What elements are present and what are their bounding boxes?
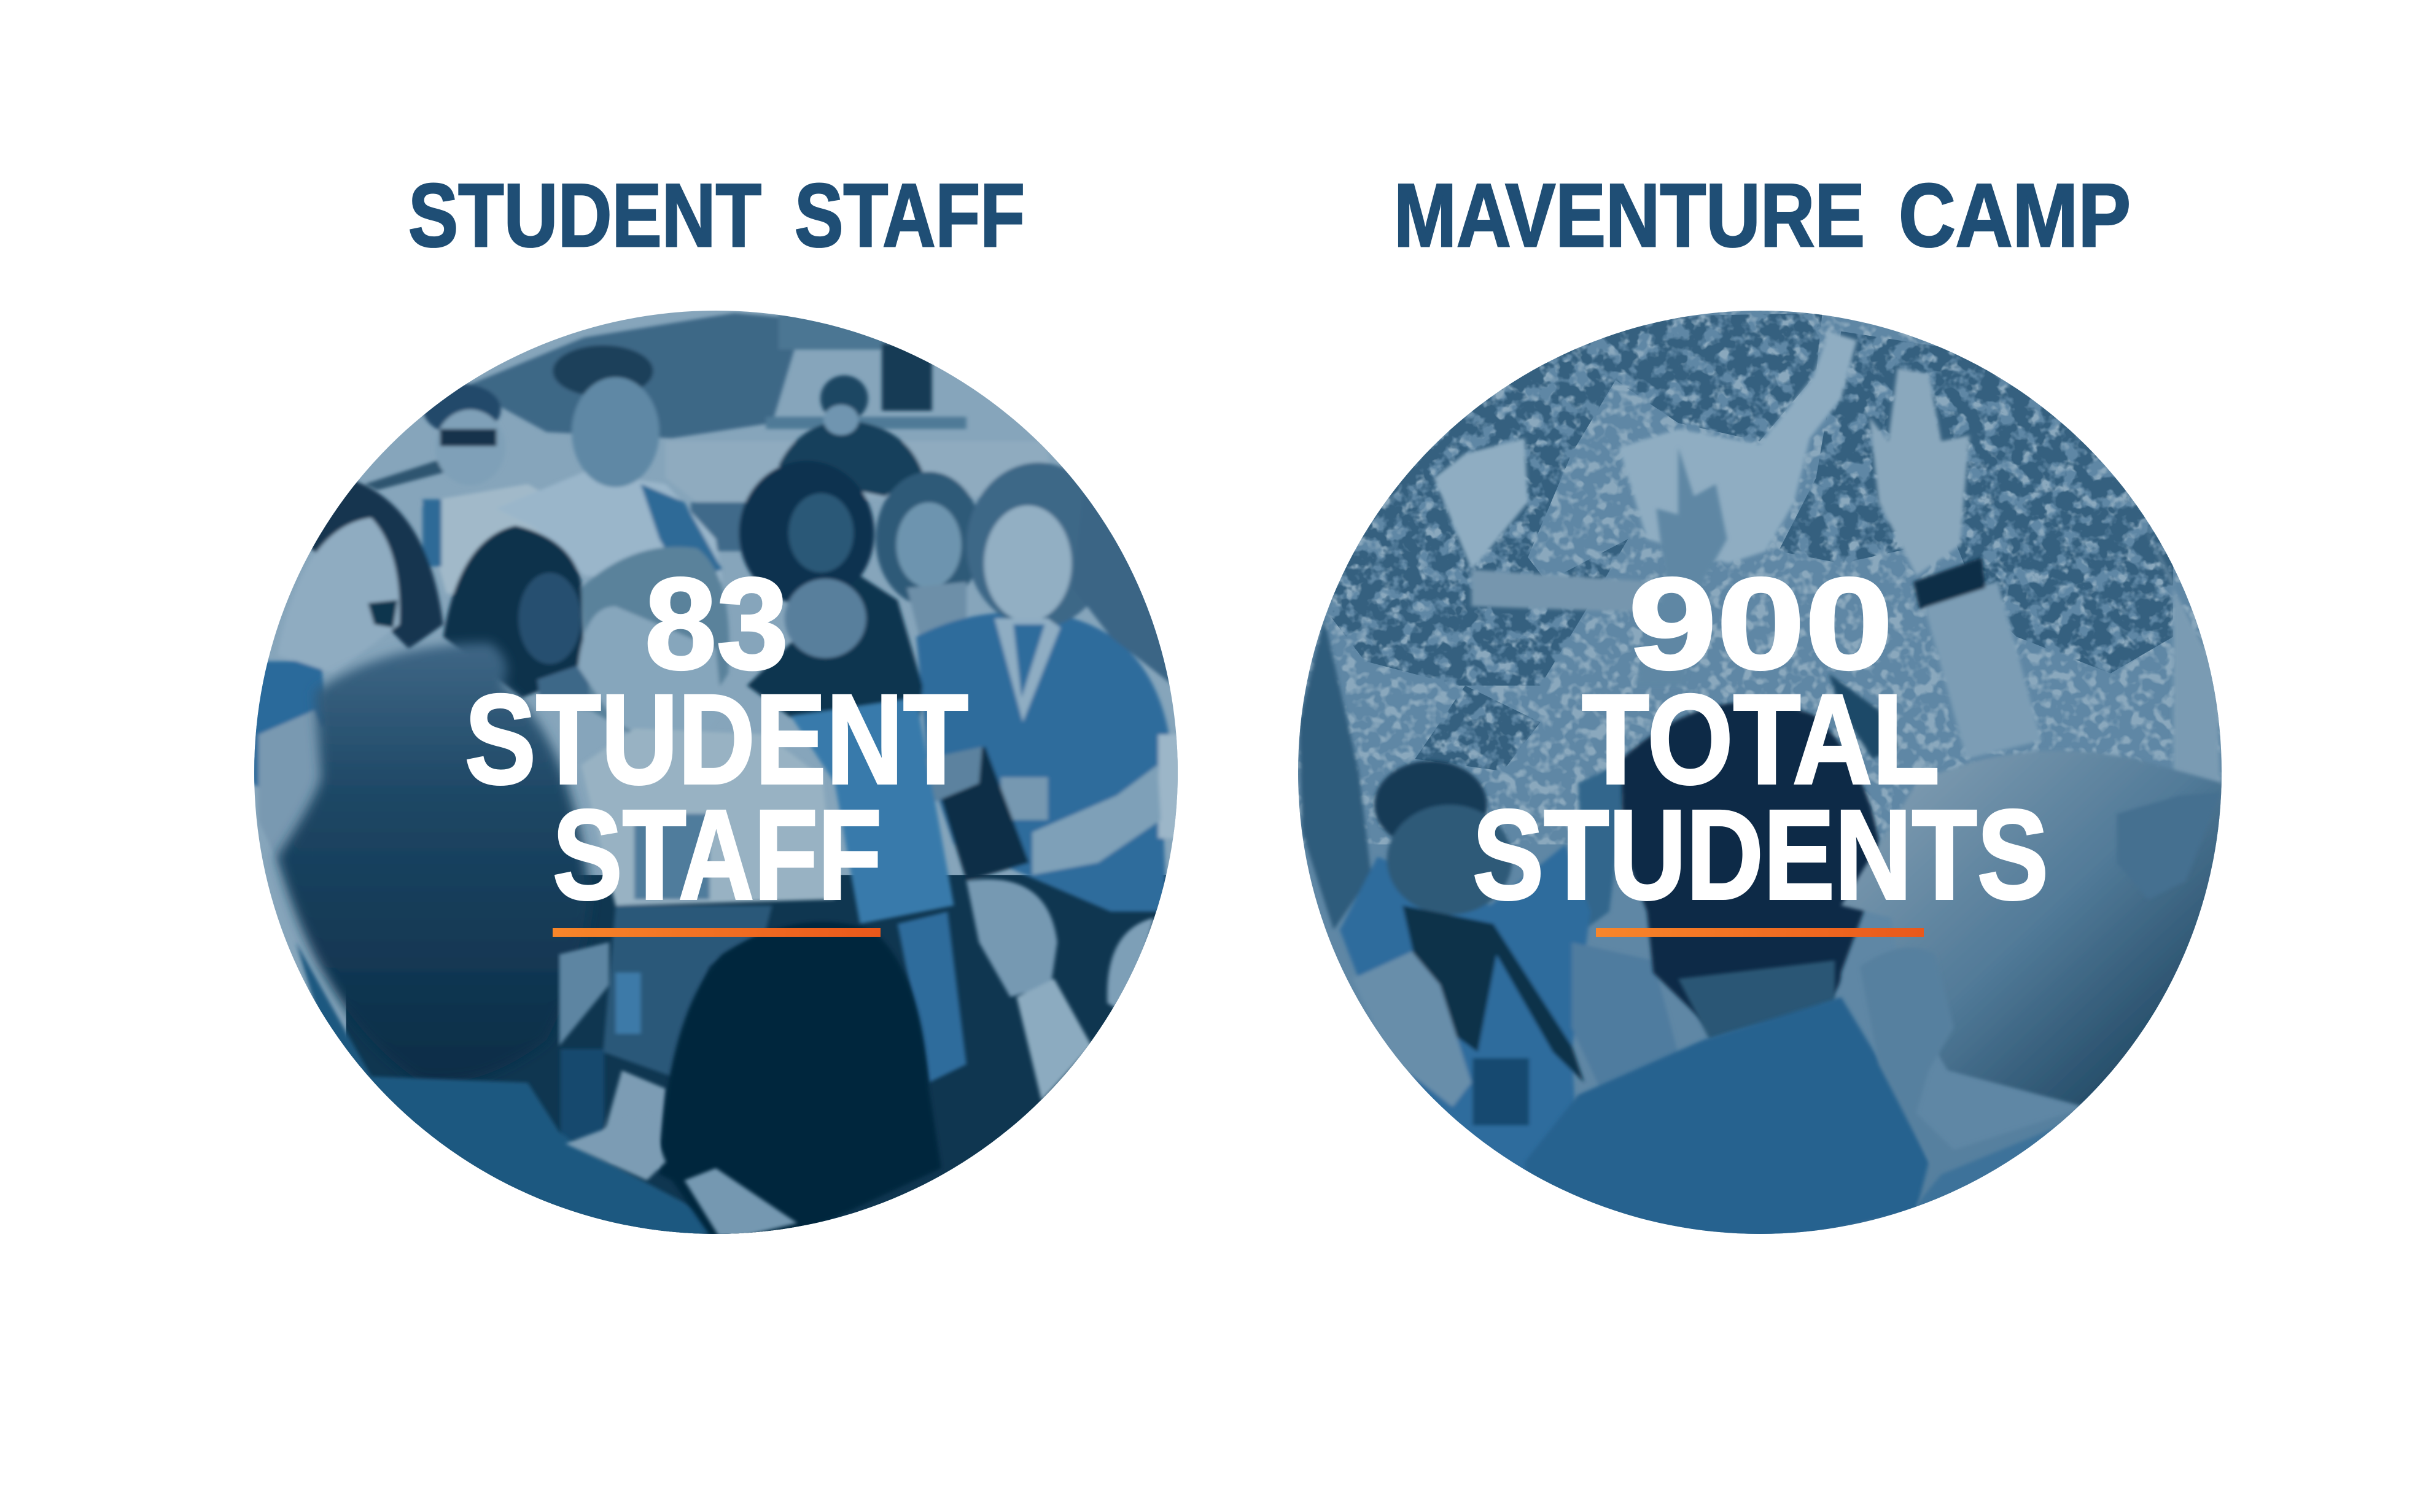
raised hand centre <box>1635 448 1727 686</box>
left arm <box>1299 618 1371 930</box>
blonde woman hair <box>1841 751 2223 1107</box>
text: 83 student staff: STAFF <box>553 784 882 926</box>
right woman <box>916 612 1170 912</box>
blond guy <box>581 547 729 759</box>
heading: student staff <box>408 165 1025 265</box>
back row figures <box>421 484 542 598</box>
text: 900 total students: STUDENTS <box>1472 784 2048 926</box>
left woman <box>252 661 327 796</box>
text: 83 student staff <box>465 551 968 926</box>
patterned shirt <box>603 905 772 1077</box>
middle crowd <box>1572 942 1684 1095</box>
sky <box>1619 331 1857 564</box>
foreground heads <box>277 643 591 1084</box>
photo: raised hands under trees with blue duotone <box>1277 295 2260 1257</box>
dark arm behind centre <box>1829 673 1897 759</box>
photo: student staff crowd with blue duotone <box>233 295 1216 1257</box>
heading: student staff: STUDENT <box>408 165 761 265</box>
dark foliage <box>1328 313 2173 771</box>
text: 900 total students <box>1472 551 2048 926</box>
orange underline <box>1596 928 1924 937</box>
text: 83 student staff: STUDENT <box>465 669 968 811</box>
panel: student staff circle <box>233 295 1216 1257</box>
boy <box>1340 845 1590 1193</box>
panel: maventure camp circle <box>1277 295 2260 1257</box>
text: 900 total students: TOTAL <box>1582 669 1940 811</box>
heading: maventure camp: CAMP <box>1899 165 2131 265</box>
man centre head <box>1622 702 1882 1028</box>
heading: student staff: STAFF <box>795 165 1025 265</box>
shirt <box>1525 997 1935 1257</box>
laughing woman <box>745 575 925 719</box>
braids woman <box>443 525 584 698</box>
text: 900 total students: 900 <box>1628 551 1893 696</box>
text: 83 student staff: 83 <box>645 551 788 696</box>
heading: maventure camp: MAVENTURE <box>1394 165 1865 265</box>
raised hand right <box>1869 368 1970 576</box>
orange underline <box>553 928 881 937</box>
